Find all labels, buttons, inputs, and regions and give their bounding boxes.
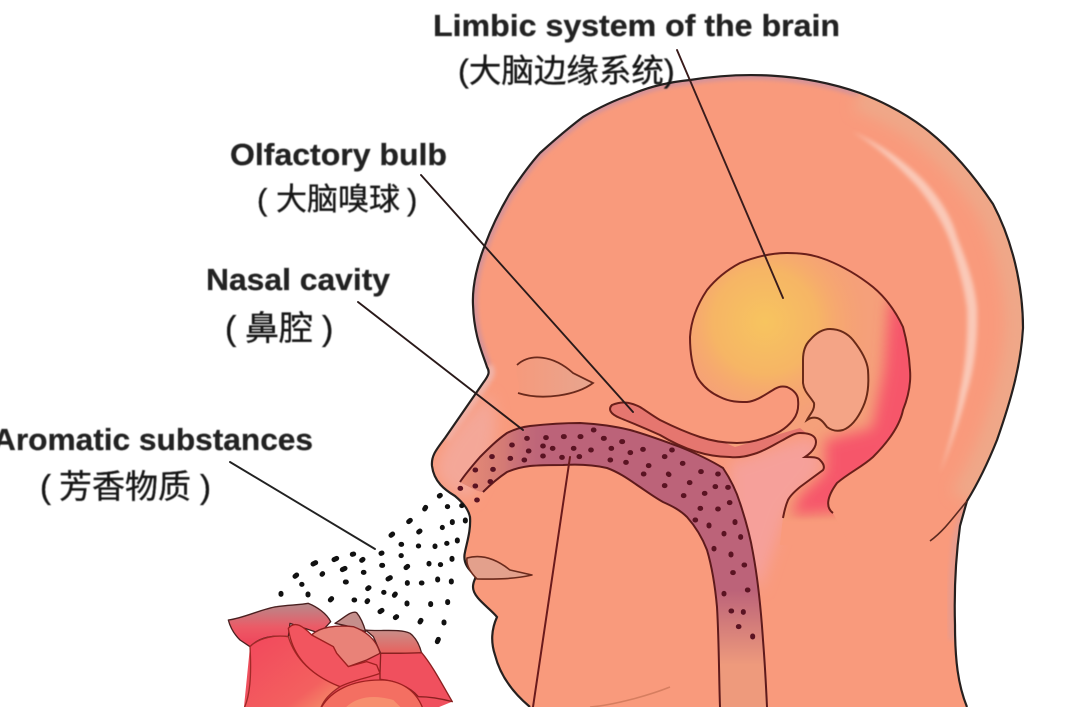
leader: passage to bottom xyxy=(533,457,570,707)
back right petal xyxy=(366,630,422,653)
limbic system of the brain xyxy=(609,252,912,540)
leader: olfactory bulb xyxy=(421,175,633,412)
inner brain lobe xyxy=(803,329,868,431)
throat pink area xyxy=(730,438,822,590)
english label: Limbic system of the brain xyxy=(433,9,840,43)
english label: Nasal cavity xyxy=(206,263,390,297)
leader: nasal cavity xyxy=(358,302,523,430)
chinese label: 大脑嗅球 xyxy=(276,182,400,217)
nasal passage fill xyxy=(460,424,766,707)
collar line at the neck xyxy=(930,501,967,541)
central front petal xyxy=(288,625,380,687)
chinese label: 鼻腔 xyxy=(245,310,313,348)
bottom centre petal xyxy=(320,680,423,707)
chinese label: ( xyxy=(40,468,51,505)
chinese label: ( xyxy=(225,310,237,348)
leader lines xyxy=(230,50,783,707)
nasal passage with odour particles xyxy=(450,415,780,707)
illustration: human head profile xyxy=(432,75,1023,707)
brain outline xyxy=(610,253,910,518)
top small petal xyxy=(335,612,366,632)
chin crease xyxy=(590,687,670,707)
chinese label: ) xyxy=(407,182,417,217)
nasal passage bottom edge xyxy=(483,465,720,707)
odour particles inside passage xyxy=(460,430,753,637)
back left petal xyxy=(228,603,331,647)
head and neck silhouette fill xyxy=(432,75,1023,707)
inner bloom glow xyxy=(343,697,403,707)
brain fill with colour glow xyxy=(611,254,910,540)
eye xyxy=(516,357,593,397)
english label: Aromatic substances xyxy=(0,423,313,457)
highlight arc on the back of the head xyxy=(853,132,977,473)
leader: aromatic substances xyxy=(230,462,375,549)
label: nasal cavity xyxy=(206,263,390,348)
large left petal xyxy=(243,636,340,707)
label: limbic system xyxy=(433,9,840,89)
inner folded petals xyxy=(312,626,380,667)
skin shading near outline xyxy=(436,75,1023,640)
head outline xyxy=(432,75,1023,707)
english label: Olfactory bulb xyxy=(230,138,447,172)
chinese label: ) xyxy=(322,310,333,348)
chinese label: ( xyxy=(257,182,268,217)
chinese label: 芳香物质 xyxy=(59,468,191,505)
aromatic particles drifting from the rose xyxy=(281,495,465,642)
label: olfactory bulb xyxy=(230,138,447,217)
leader: limbic system xyxy=(677,50,783,298)
mouth xyxy=(467,557,532,579)
nasal passage top edge xyxy=(460,423,767,707)
label: aromatic substances xyxy=(0,423,313,505)
eye outline xyxy=(517,357,593,397)
rose flower xyxy=(228,603,452,707)
chinese label: ) xyxy=(200,468,211,505)
rose base fill xyxy=(243,647,452,707)
chinese label: (大脑边缘系统) xyxy=(458,53,675,89)
right lower petal xyxy=(380,653,452,702)
